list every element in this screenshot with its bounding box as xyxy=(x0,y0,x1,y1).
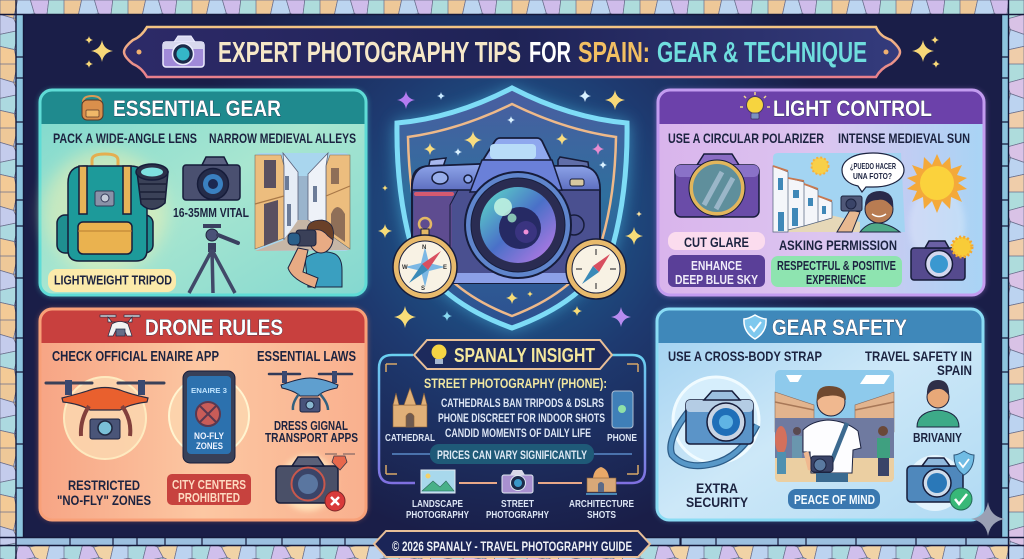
insight frame xyxy=(379,355,645,483)
panel: drone rules xyxy=(39,309,367,520)
heading: drone rules: DRONE RULES xyxy=(145,315,283,340)
icon: light bulb xyxy=(740,92,770,119)
text: brivaniy: BRIVANIY xyxy=(913,430,962,445)
icon: tripod xyxy=(189,224,238,293)
panel: light control xyxy=(657,90,985,296)
icon: compass with ring: W xyxy=(402,265,408,271)
title sparkles xyxy=(85,36,940,68)
icon: street camera xyxy=(502,470,533,493)
chip: lightweight tripod: LIGHTWEIGHT TRIPOD xyxy=(54,272,172,288)
heading: gear safety: GEAR SAFETY xyxy=(772,315,907,340)
stars xyxy=(378,90,643,328)
insight bullets: PHONE DISCREET FOR INDOOR SHOTS xyxy=(438,411,605,425)
chip: city centers prohibited: CITY CENTERS xyxy=(172,478,246,492)
labels: photo types: LANDSCAPE xyxy=(412,498,463,510)
text: dress gignal transport apps: TRANSPORT APPS xyxy=(265,431,358,445)
title text: FOR xyxy=(529,37,571,69)
figure: local man xyxy=(837,191,900,232)
center emblem: camera shield xyxy=(378,88,643,330)
speech bubble xyxy=(842,153,904,192)
insight subheading: STREET PHOTOGRAPHY (PHONE): xyxy=(424,376,607,391)
icon: strap camera xyxy=(671,377,759,466)
insight title chip xyxy=(414,340,612,369)
chip: enhance deep blue sky xyxy=(668,255,765,287)
text: restricted zones xyxy=(57,477,151,508)
icon: landscape xyxy=(421,470,455,493)
chip: respectful experience: EXPERIENCE xyxy=(806,273,866,287)
image: plaza with traveller xyxy=(775,370,894,482)
labels: photo types: ARCHITECTURE xyxy=(569,498,634,510)
speech bubble: ¿PUEDO HACER xyxy=(850,161,896,171)
panel: gear safety xyxy=(656,309,984,520)
footer plaque xyxy=(374,531,650,557)
icon: compass with ring xyxy=(393,218,457,299)
icon: enaire phone xyxy=(169,371,249,463)
chip: enhance deep blue sky: ENHANCE xyxy=(691,259,742,273)
icon: header drone xyxy=(100,315,140,336)
icon: enaire phone: ZONES xyxy=(196,441,223,452)
text: asking permission: ASKING PERMISSION xyxy=(779,237,897,253)
icon: compass xyxy=(566,239,626,299)
text: dress gignal transport apps xyxy=(265,419,358,445)
text: narrow alleys: NARROW MEDIEVAL ALLEYS xyxy=(209,130,356,146)
labels: photo types: PHOTOGRAPHY xyxy=(406,509,469,521)
chip: peace of mind xyxy=(788,489,880,509)
figure: traveller portrait xyxy=(917,380,959,427)
icon: camera with no drone xyxy=(276,454,355,511)
title text: EXPERT PHOTOGRAPHY TIPS xyxy=(218,37,521,69)
text: extra security xyxy=(686,480,749,510)
icon: shield xyxy=(744,315,766,339)
chip: cut glare: CUT GLARE xyxy=(684,234,749,250)
labels: photo types: STREET xyxy=(501,498,534,510)
insight title chip: SPANALY INSIGHT xyxy=(454,345,595,367)
labels: photo types xyxy=(406,498,634,521)
heading: essential gear: ESSENTIAL GEAR xyxy=(113,96,281,121)
shield xyxy=(397,88,627,328)
text: essential laws: ESSENTIAL LAWS xyxy=(257,349,356,365)
text: travel safety: TRAVEL SAFETY IN xyxy=(865,348,972,364)
text: 16-35mm: 16-35MM VITAL xyxy=(173,206,249,220)
icon: camera with shield and check xyxy=(907,451,974,511)
panel: essential gear xyxy=(39,90,367,296)
chip: city centers prohibited xyxy=(167,474,251,505)
icon: sun xyxy=(907,154,967,265)
image: white village xyxy=(773,153,905,232)
icon: phone xyxy=(612,391,633,428)
speech bubble: UNA FOTO? xyxy=(853,171,892,181)
text: cross-body strap: USE A CROSS-BODY STRAP xyxy=(668,348,822,364)
icon: polarizer camera xyxy=(675,154,759,217)
insight bullets xyxy=(438,396,605,440)
decorative grey sparkle xyxy=(971,502,1005,536)
text: wide-angle lens: PACK A WIDE-ANGLE LENS xyxy=(53,130,197,146)
divider chip: prices: PRICES CAN VARY SIGNIFICANTLY xyxy=(437,448,587,462)
chip: city centers prohibited: PROHIBITED xyxy=(178,491,240,505)
insight bullets: CANDID MOMENTS OF DAILY LIFE xyxy=(445,426,591,440)
icon: title camera xyxy=(163,36,204,67)
icon: enaire phone: NO-FLY xyxy=(194,431,225,442)
chip: respectful experience: RESPECTFUL & POSITIVE xyxy=(777,259,896,273)
icon: camera xyxy=(183,157,240,200)
text: extra security: SECURITY xyxy=(686,494,749,510)
chip: lightweight tripod xyxy=(48,269,176,292)
title text: GEAR & TECHNIQUE xyxy=(657,37,867,69)
title text: SPAIN: xyxy=(578,37,650,69)
text: travel safety xyxy=(865,348,972,378)
divider chip: prices xyxy=(392,444,632,464)
text: phone label: PHONE xyxy=(607,432,637,444)
icon: architecture xyxy=(586,467,617,494)
icon: camera with sun xyxy=(911,237,972,280)
icon: lens xyxy=(136,164,168,209)
icon: hero camera xyxy=(412,138,600,283)
labels: photo types: PHOTOGRAPHY xyxy=(486,509,549,521)
icon: enaire phone: ENAIRE 3 xyxy=(191,388,227,395)
text: restricted zones: RESTRICTED xyxy=(68,477,140,493)
figure: photographer xyxy=(288,220,342,288)
text: travel safety: SPAIN xyxy=(937,362,972,378)
title banner xyxy=(124,27,900,77)
icon: compass with ring: S xyxy=(421,286,425,292)
insight bullets: CATHEDRALS BAN TRIPODS & DSLRS xyxy=(441,396,604,410)
icon: blue drone xyxy=(269,371,352,412)
text: polarizer: USE A CIRCULAR POLARIZER xyxy=(668,130,824,146)
text: extra security: EXTRA xyxy=(696,480,738,496)
text: restricted zones: "NO-FLY" ZONES xyxy=(57,492,151,508)
chip: enhance deep blue sky: DEEP BLUE SKY xyxy=(675,273,759,287)
icon: cathedral xyxy=(393,388,427,427)
icon: compass with ring: E xyxy=(443,265,447,271)
footer plaque: © 2026 SPANALY - TRAVEL PHOTOGRAPHY GUIDE xyxy=(392,538,632,554)
panel: spanaly insight xyxy=(379,340,645,521)
labels: photo types: SHOTS xyxy=(587,509,616,521)
chip: peace of mind: PEACE OF MIND xyxy=(794,492,875,507)
image: medieval alley xyxy=(255,153,350,251)
chip: respectful experience xyxy=(771,256,902,287)
text: cathedral label: CATHEDRAL xyxy=(385,432,435,444)
icon: backpack xyxy=(57,154,153,261)
heading: light control: LIGHT CONTROL xyxy=(773,96,932,121)
text: enaire app: CHECK OFFICIAL ENAIRE APP xyxy=(52,349,219,365)
text: medieval sun: INTENSE MEDIEVAL SUN xyxy=(838,130,970,146)
text: dress gignal transport apps: DRESS GIGNAL xyxy=(274,419,348,433)
icon: compass with ring: N xyxy=(422,245,426,251)
icon: red drone xyxy=(46,377,164,459)
title text xyxy=(218,37,867,69)
icon: small backpack xyxy=(82,96,103,120)
